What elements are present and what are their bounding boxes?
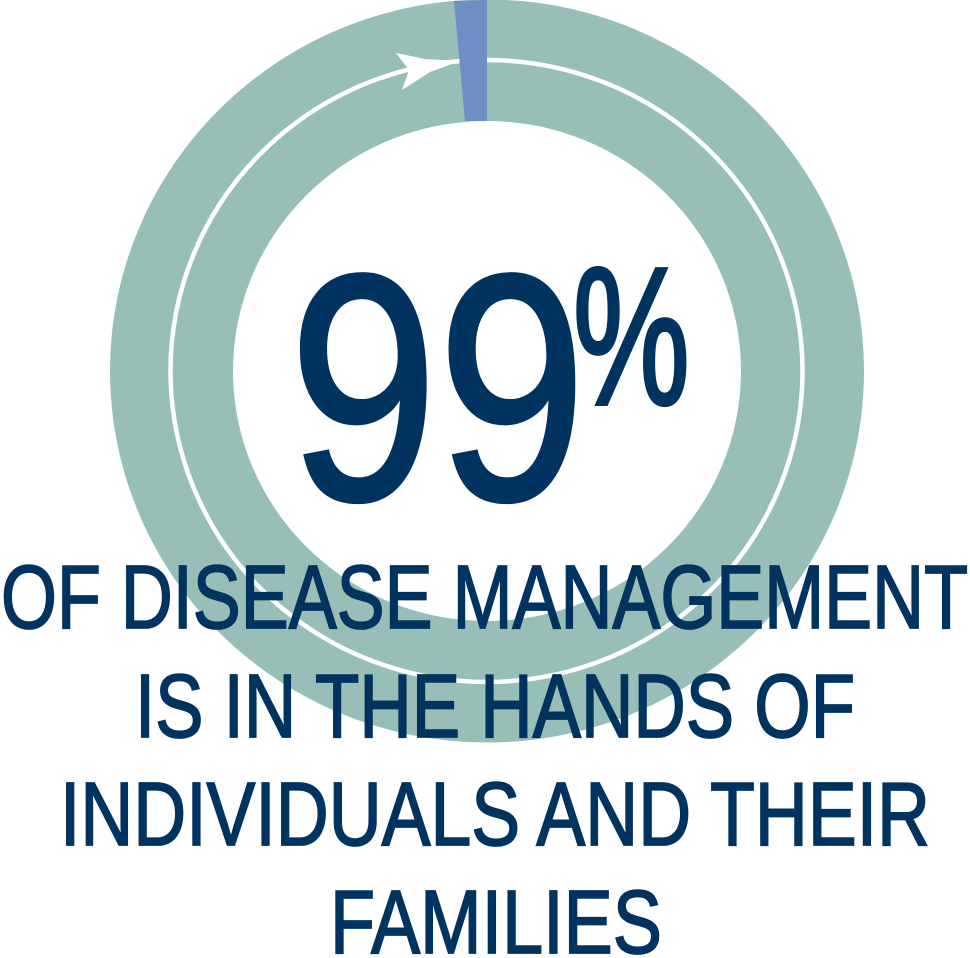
caption xyxy=(1,548,968,958)
donut chart xyxy=(110,0,864,742)
circular arrow line xyxy=(170,60,802,682)
number 99: 99 xyxy=(289,207,586,568)
donut segment: 1% xyxy=(454,0,487,121)
big number: 99% xyxy=(289,207,690,568)
percent sign: % xyxy=(573,228,690,446)
arrow head xyxy=(396,53,460,90)
donut ring: 99% xyxy=(110,0,864,742)
